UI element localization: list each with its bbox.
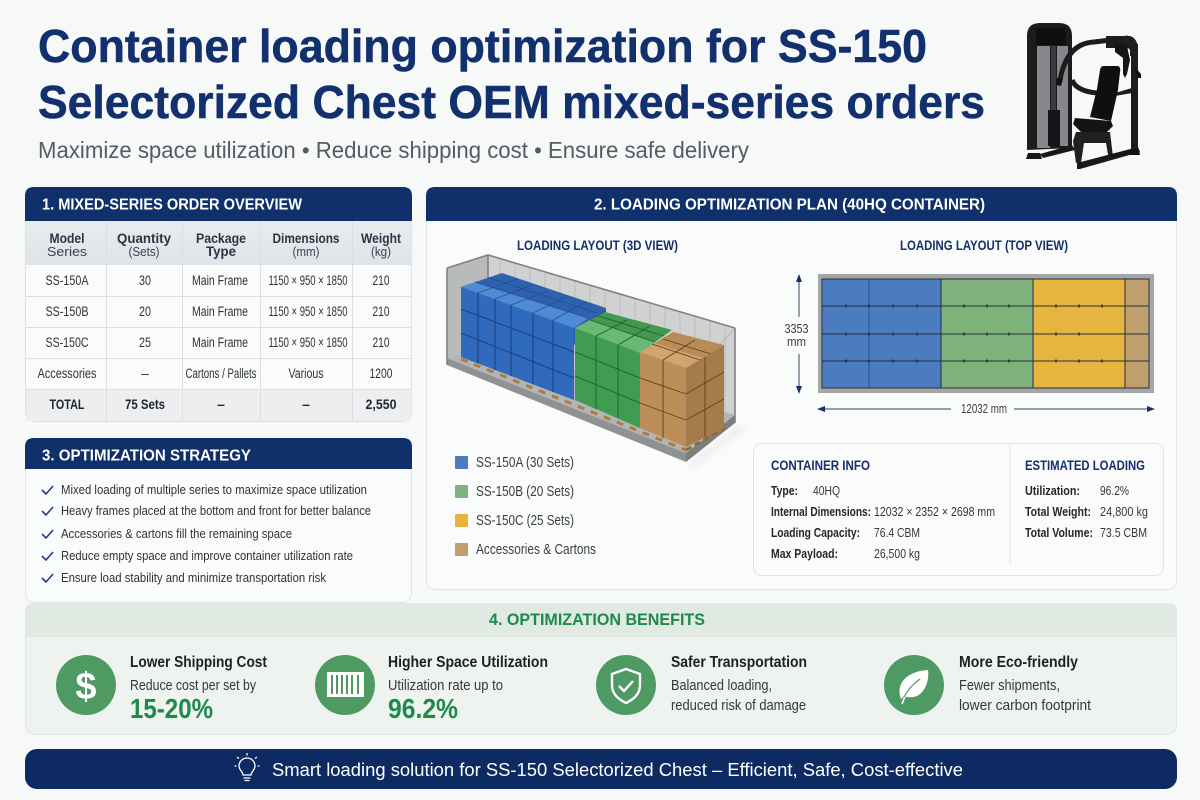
table rows: – [302,396,310,412]
benefit: more eco-friendly: lower carbon footprint [959,698,1091,714]
table rows: 20 [139,304,151,319]
estimated loading: Total Volume: [1025,525,1093,540]
benefit: safer transportation [596,654,807,715]
table rows: 1150 × 950 × 1850 [268,304,348,319]
benefit: safer transportation: Safer Transportation [671,654,807,671]
strategy checklist: Mixed loading of multiple series to maximize space utilization [61,482,367,497]
estimated loading: 73.5 CBM [1100,525,1147,540]
title [38,20,985,128]
container info: 26,500 kg [874,546,920,561]
table column headers: (Sets) [128,244,160,259]
table rows: Cartons / Pallets [186,366,257,381]
container info: 12032 × 2352 × 2698 mm [874,504,995,519]
strategy checklist [42,482,371,585]
title: Selectorized Chest OEM mixed-series orders [38,76,985,128]
benefit: lower shipping cost: 15-20% [130,693,213,724]
arrow: container length dimension [817,402,1155,416]
legend: SS-150B (20 Sets) [476,484,574,500]
table column headers: Quantity [117,231,171,246]
table column headers: Dimensions [272,231,340,246]
estimated loading: 24,800 kg [1100,504,1148,519]
icon: dollar [56,655,116,715]
load: SS-150A blue blocks [461,273,606,400]
table column headers: Package [196,231,246,246]
benefit: safer transportation: reduced risk of damage [671,698,806,714]
table rows: 1200 [370,366,392,381]
table rows: – [141,366,149,381]
table rows: Various [288,366,324,381]
table rows: SS-150B [46,304,88,319]
section heading 3: 3. OPTIMIZATION STRATEGY [42,448,251,464]
footer banner [25,749,1177,789]
table rows: 75 Sets [125,396,165,412]
container info: Type: [771,483,798,498]
zone: SS-150B [941,279,1033,388]
benefit: more eco-friendly: Fewer shipments, [959,678,1060,694]
load: pallets [461,359,686,450]
table rows: 1150 × 950 × 1850 [268,273,348,288]
load: SS-150B green blocks [575,312,672,428]
table rows: SS-150C [46,335,89,350]
estimated loading: Utilization: [1025,483,1080,498]
arrow: container width dimension: 3353 [784,322,809,336]
legend: SS-150A (30 Sets) [476,455,574,471]
title: Container loading optimization for SS-150 [38,20,927,72]
benefit: lower shipping cost: Lower Shipping Cost [130,654,267,671]
table column headers: Series [47,244,88,259]
panel: optimization strategy [25,438,412,602]
container info: CONTAINER INFO [771,458,870,473]
section heading 4: 4. OPTIMIZATION BENEFITS [489,611,705,629]
table rows: 210 [372,335,390,350]
icon: shield [596,655,656,715]
table rows: Main Frame [192,335,248,350]
strategy checklist: Accessories & cartons fill the remaining space [61,526,292,541]
table rows: 25 [139,335,151,350]
top view heading: LOADING LAYOUT (TOP VIEW) [900,238,1068,253]
benefit: higher space utilization [315,654,548,724]
benefit: lower shipping cost: Reduce cost per set by [130,678,257,694]
3D view heading: LOADING LAYOUT (3D VIEW) [517,238,678,253]
table column headers: Model [50,231,84,246]
panel: container info and estimated loading [754,444,1164,576]
legend [455,455,596,558]
panel: loading optimization plan [426,187,1177,590]
table rows: TOTAL [50,396,85,412]
table rows: 2,550 [366,396,397,412]
table column headers: Weight [361,231,401,246]
footer text: Smart loading solution for SS-150 Selectorized Chest – Efficient, Safe, Cost-effective [272,759,963,780]
table header background [26,221,411,265]
icon: dollar: $ [75,666,97,708]
benefit: lower shipping cost [56,654,267,724]
table rows [38,273,397,412]
panel: mixed-series order overview [25,187,412,422]
benefit: safer transportation: Balanced loading, [671,678,772,694]
icon: leaf [884,655,944,715]
table rows: Accessories [38,366,97,381]
table rows: Main Frame [192,304,248,319]
table rows: – [217,396,225,412]
benefit: higher space utilization: Utilization rate up to [388,678,503,694]
subtitle: Maximize space utilization • Reduce shipping cost • Ensure safe delivery [38,137,749,163]
benefit: more eco-friendly [884,654,1091,715]
icon: selectorized chest press machine [1026,23,1141,169]
estimated loading: Total Weight: [1025,504,1091,519]
icon: container [315,655,375,715]
table column headers [47,231,401,259]
arrow: container width dimension [784,274,809,394]
table column headers: (mm) [292,244,320,259]
chart: 3D container view [447,255,746,467]
table rows: 1150 × 950 × 1850 [268,335,348,350]
container info: 76.4 CBM [874,525,920,540]
container info: Internal Dimensions: [771,504,871,519]
table rows: 210 [372,304,390,319]
zone: accessories [1125,279,1149,388]
table rows: Main Frame [192,273,248,288]
benefit: higher space utilization: Higher Space Utilization [388,654,548,671]
zone: SS-150A [822,279,941,388]
benefit: higher space utilization: 96.2% [388,693,458,724]
container info [771,458,995,561]
container info: 40HQ [813,483,840,498]
table column headers: Type [206,244,236,259]
estimated loading [1025,458,1148,540]
legend: SS-150C (25 Sets) [476,513,574,529]
load: accessories tan blocks [640,332,724,447]
zone: SS-150C [1033,279,1125,388]
section heading 2 [426,187,1177,221]
strategy checklist: Reduce empty space and improve container utilization rate [61,548,353,563]
total row background [26,389,411,421]
arrow: container length dimension: 12032 mm [961,402,1007,416]
chart: top view layout [818,274,1154,393]
strategy checklist: Ensure load stability and minimize transportation risk [61,570,326,585]
icon: light bulb [234,753,260,780]
container info: Loading Capacity: [771,525,860,540]
table rows: 30 [139,273,151,288]
container info: Max Payload: [771,546,838,561]
strategy checklist: Heavy frames placed at the bottom and front for better balance [61,503,371,518]
benefit: more eco-friendly: More Eco-friendly [959,654,1078,671]
table rows: SS-150A [46,273,88,288]
estimated loading: 96.2% [1100,483,1129,498]
table rows: 210 [372,273,390,288]
table column headers: (kg) [371,244,391,259]
estimated loading: ESTIMATED LOADING [1025,458,1145,473]
legend: Accessories & Cartons [476,542,596,558]
arrow: container width dimension: mm [787,335,806,349]
section heading 1 [25,187,412,221]
section heading 1: 1. MIXED-SERIES ORDER OVERVIEW [42,196,303,214]
section heading 2: 2. LOADING OPTIMIZATION PLAN (40HQ CONTAINER) [594,196,985,214]
panel: optimization benefits [25,603,1177,734]
section heading 3 [25,438,412,469]
